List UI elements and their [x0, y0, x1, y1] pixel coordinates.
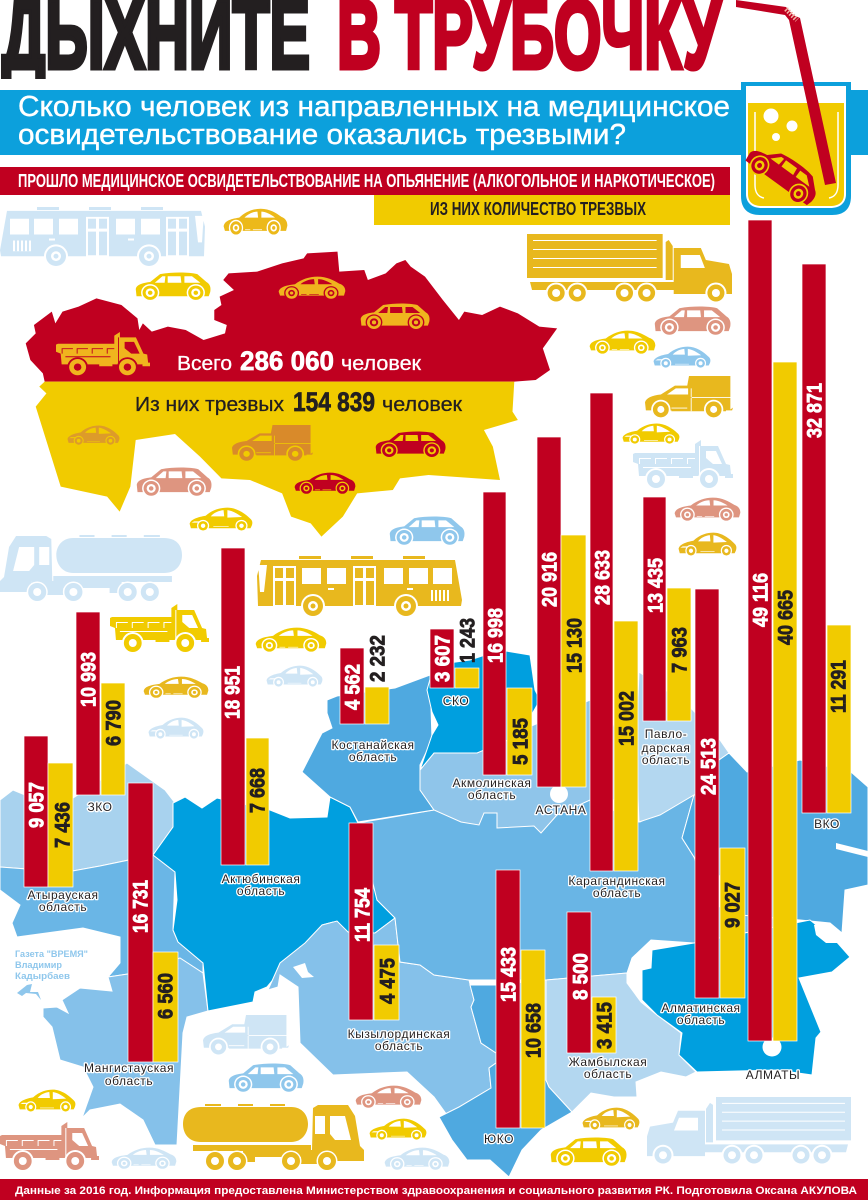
region: Алматинская: [642, 920, 850, 1075]
bars: Жамбылская: [567, 912, 647, 1081]
icon: yellow sedan: [256, 628, 326, 653]
icon: blue suv: [390, 517, 465, 546]
total sober: Из них трезвых 154 839 человек: 154 839: [293, 387, 375, 417]
icon: yellow suv: [551, 1138, 626, 1167]
icon: light dumper: [633, 440, 733, 490]
bars: Кызылординская: 4 475: [376, 958, 400, 1004]
region: ЮКО: [439, 980, 572, 1177]
icon: gold van: [645, 376, 733, 419]
bars: Астана: [536, 437, 586, 817]
bars: СКО: 3 607: [432, 635, 454, 682]
lake: [814, 923, 838, 943]
bars: Актюбинская: 7 668: [246, 768, 270, 813]
bars: Акмолинская: [453, 492, 532, 802]
bars: ЮКО: 15 433: [498, 947, 520, 1002]
icon: pale van: [203, 1015, 289, 1056]
icon: gold bus: [257, 556, 462, 618]
region: Костанайская: [302, 675, 434, 822]
bars: Акмолинская: 16 998: [484, 608, 508, 663]
bars: Костанайская: 2 232: [366, 635, 390, 682]
bars: Жамбылская: область: [584, 1067, 632, 1081]
region: Акмолинская: [420, 700, 640, 833]
title: Дыхните в трубочку: [0, 0, 722, 90]
bars: Алматы: [746, 220, 800, 1082]
region: Кызылординская: [268, 918, 496, 1115]
bars: Кызылординская: область: [375, 1039, 423, 1053]
bars: Жамбылская: 8 500: [570, 953, 592, 1000]
bars: СКО: СКО: [443, 694, 469, 708]
region: ЗКО: [0, 763, 175, 872]
blue question band: [0, 90, 868, 155]
bars: Актюбинская: область: [237, 884, 285, 898]
icon: yellow coupe: [190, 508, 252, 532]
bars: Алматинская: область: [677, 1013, 725, 1027]
bars: ЗКО: 10 993: [78, 652, 100, 707]
bars: Павлодарская: дарская: [642, 741, 690, 755]
bars: Атырауская: область: [39, 900, 87, 914]
icon: salmon suv: [137, 468, 212, 497]
icon: pale sedan: [385, 1148, 449, 1171]
bars: Костанайская: [332, 635, 414, 764]
map: republic total, red top half: [26, 252, 557, 382]
bars: Алматы: 40 665: [774, 590, 798, 645]
blue question band: освидетельствование оказались трезвыми?: [18, 119, 626, 151]
bars: СКО: 1 243: [456, 618, 480, 663]
bars: Кызылординская: [348, 823, 450, 1053]
footer source line: Данные за 2016 год. Информация предоставлена Министерством здравоохранения и социального развития РК. Подготовила Оксана АКУЛОВА: [15, 1185, 857, 1197]
region: Атырауская: [0, 855, 203, 977]
bars: Атырауская: [24, 736, 99, 914]
bars: Атырауская: 9 057: [26, 782, 48, 828]
bars: Кызылординская: Кызылординская: [348, 1027, 450, 1041]
region: ВКО: [682, 753, 868, 933]
bars: Павлодарская: область: [642, 753, 690, 767]
icon: sedan: [224, 209, 287, 236]
bars: Карагандинская: [568, 393, 666, 900]
bars: Атырауская: Атырауская: [27, 888, 99, 902]
total: Всего 286 060 человек: Всего: [177, 353, 232, 375]
credit: newspaper and artist: [15, 949, 88, 1000]
credit: newspaper and artist: Кадырбаев: [15, 971, 70, 982]
bars: Костанайская: 4 562: [342, 664, 364, 710]
region: Павлодарская: [636, 672, 729, 822]
map: Kazakhstan regions: [0, 650, 868, 1177]
credit: newspaper and artist: Газета "ВРЕМЯ": [15, 949, 88, 960]
bars: Костанайская: область: [349, 750, 397, 764]
total sober: Из них трезвых 154 839 человек: [135, 387, 462, 417]
bars: ЮКО: 10 658: [522, 1003, 546, 1058]
icon: salmon dumper: [0, 1122, 99, 1172]
icon: pale coupe: [267, 666, 322, 688]
icon: pale sedan: [112, 1148, 176, 1170]
bars: Астана: 15 130: [564, 618, 586, 673]
bars: Карагандинская: область: [593, 886, 641, 900]
bars: Алматинская: [661, 589, 745, 1027]
bars: Алматы: АЛМАТЫ: [746, 1068, 800, 1082]
icon: sedan on red: [279, 277, 345, 300]
bars: Карагандинская: 15 002: [616, 691, 638, 746]
bars: Алматинская: 24 513: [698, 738, 720, 795]
bars: Алматинская: 9 027: [722, 882, 744, 928]
icon: gold sedan: [144, 677, 208, 699]
icon: yellow dumper: [110, 604, 209, 654]
icon: gold tanker: [183, 1104, 364, 1172]
region: Мангистауская: [43, 958, 208, 1145]
bars: Актюбинская: 18 951: [222, 666, 244, 719]
total: Всего 286 060 человек: 286 060: [240, 346, 334, 376]
Astana circle: [550, 785, 568, 803]
bars: Астана: АСТАНА: [536, 803, 586, 817]
map: republic sober, yellow lower half: [36, 382, 518, 537]
bars: Жамбылская: Жамбылская: [569, 1055, 647, 1069]
region: СКО: [420, 650, 540, 770]
bars: ЗКО: ЗКО: [87, 800, 113, 814]
icon: light bus: [0, 207, 205, 268]
bars: Карагандинская: Карагандинская: [568, 874, 666, 888]
icon: yellow coupe: [623, 424, 679, 445]
icon: pale box truck: [647, 1097, 851, 1166]
bars: Актюбинская: [221, 548, 300, 898]
bars: Мангистауская: область: [105, 1074, 153, 1088]
total sober: Из них трезвых 154 839 человек: Из них трезвых: [135, 394, 284, 416]
icon: gold box truck: [527, 234, 732, 304]
bars: ВКО: 11 291: [828, 660, 850, 713]
blue question band: Сколько человек из направленных на медицинское: [18, 91, 730, 123]
Almaty circle: [762, 1038, 782, 1056]
icon: yellow coupe: [370, 1119, 426, 1141]
bars: ЗКО: 6 790: [102, 700, 126, 746]
icon: suv on red: [361, 304, 430, 330]
icon: gold coupe: [583, 1108, 639, 1131]
icon: blue coupe: [654, 347, 710, 369]
bars: ЗКО: [76, 612, 126, 814]
bars: Акмолинская: Акмолинская: [453, 776, 531, 790]
icon: light tanker: [0, 535, 182, 602]
icon: salmon suv: [655, 307, 730, 336]
bars: ЮКО: ЮКО: [484, 1132, 514, 1146]
bars: Алматинская: Алматинская: [661, 1001, 741, 1015]
total sober: Из них трезвых 154 839 человек: человек: [382, 394, 462, 416]
icon: blue suv: [229, 1064, 304, 1093]
bars: Мангистауская: [84, 783, 178, 1088]
total: Всего 286 060 человек: человек: [341, 353, 421, 375]
footer source line: [0, 1179, 868, 1200]
bars: Мангистауская: 16 731: [130, 880, 152, 933]
icon: yellow coupe: [19, 1090, 75, 1113]
region: Жамбылская: [546, 973, 696, 1112]
icon: dumper on red: [56, 332, 150, 377]
lake: Zaysan: [836, 843, 868, 857]
icon: salmon sedan: [675, 498, 740, 522]
region: Актюбинская: [153, 797, 395, 1011]
bars: ВКО: 32 871: [804, 383, 826, 438]
icon: glass with straw and car: [736, 0, 851, 215]
bars: СКО: [430, 618, 480, 708]
bars: Павлодарская: [642, 497, 692, 767]
icon: suv: [136, 273, 211, 301]
credit: newspaper and artist: Владимир: [15, 960, 62, 971]
icon: red suv: [376, 432, 446, 458]
vehicles: top map and around: [0, 207, 851, 1172]
icon: coupe on yellow: [68, 426, 119, 446]
Aral sea: [293, 963, 314, 978]
bars: Алматы: 49 116: [750, 573, 772, 627]
icon: pale coupe: [149, 718, 203, 740]
legend: yellow bar: [374, 195, 730, 225]
bars: Актюбинская: Актюбинская: [222, 872, 300, 886]
bars: ВКО: [802, 264, 851, 831]
bars: Жамбылская: 3 415: [594, 1002, 616, 1049]
bars: Астана: 20 916: [538, 552, 562, 607]
icon: gold coupe: [679, 533, 736, 557]
bars: Атырауская: 7 436: [52, 802, 74, 848]
bars: Кызылординская: 11 754: [352, 888, 374, 942]
region: Карагандинская: [358, 795, 800, 980]
bars: ЮКО: [484, 870, 546, 1146]
bars: Костанайская: Костанайская: [332, 738, 414, 752]
icon: salmon sedan: [356, 1086, 421, 1109]
bars: Мангистауская: Мангистауская: [84, 1061, 174, 1075]
legend: red bar: [0, 167, 730, 195]
bars: Акмолинская: 5 185: [510, 718, 532, 765]
icon: yellow sedan: [590, 331, 655, 355]
bars: Павлодарская: Павло-: [645, 727, 687, 741]
bars: Павлодарская: 7 963: [668, 627, 692, 673]
icon: red sedan: [295, 473, 355, 495]
bars: Мангистауская: 6 560: [154, 973, 178, 1019]
legend: yellow bar: ИЗ НИХ КОЛИЧЕСТВО ТРЕЗВЫХ: [430, 199, 646, 219]
bars: ВКО: ВКО: [814, 817, 840, 831]
bars: Павлодарская: 13 435: [644, 558, 668, 613]
icon: van on yellow: [232, 425, 313, 462]
total: Всего 286 060 человек: [177, 346, 421, 376]
bars: Акмолинская: область: [468, 788, 516, 802]
bars: Карагандинская: 28 633: [592, 550, 614, 605]
